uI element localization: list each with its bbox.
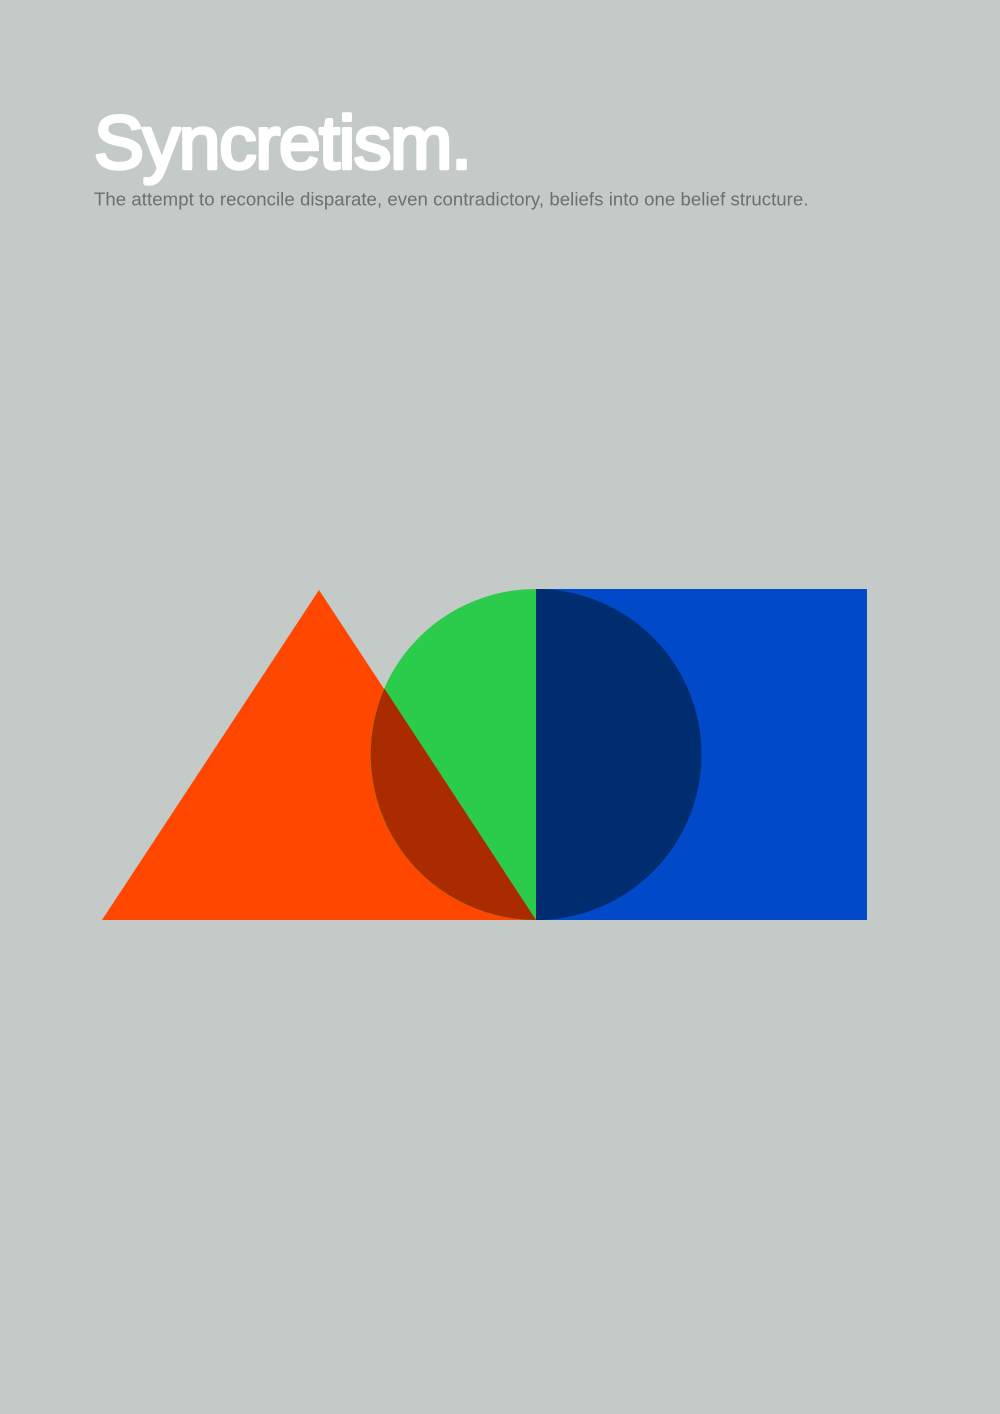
subtitle: The attempt to reconcile disparate, even contradictory, beliefs into one belief structure.: [94, 188, 808, 210]
triangle: orange: [102, 590, 536, 920]
overlap: circle and triangle: [371, 688, 536, 920]
square: blue: [536, 589, 867, 920]
title: Syncretism.: [94, 100, 472, 184]
half circle: green: [370, 589, 536, 920]
overlap: circle and square: [536, 589, 701, 920]
diagram: syncretism shapes: [102, 589, 867, 920]
